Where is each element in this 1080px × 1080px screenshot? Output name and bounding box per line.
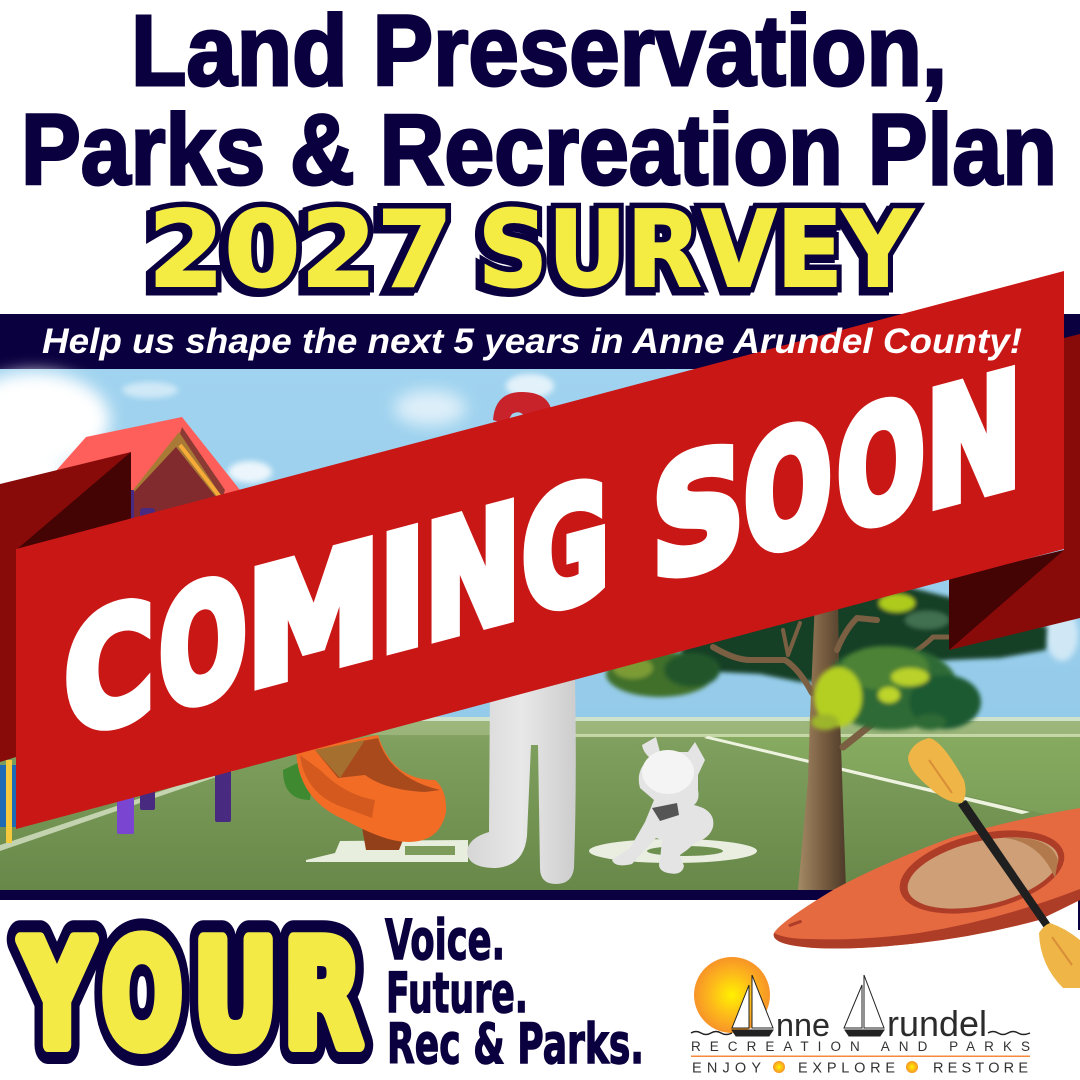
ribbon banner xyxy=(0,271,1080,829)
your wordmark xyxy=(19,910,362,1080)
your wordmark: O xyxy=(102,910,182,1079)
right ribbon tail xyxy=(949,334,1080,650)
field marking under slide xyxy=(306,840,468,862)
your lockup xyxy=(19,908,644,1080)
waves xyxy=(691,1032,1030,1034)
tree xyxy=(606,585,1047,890)
subtitle: 2027 survey: SURVEY xyxy=(474,192,911,314)
coming soon text: O xyxy=(837,363,925,568)
posts xyxy=(117,780,134,834)
orange slide xyxy=(283,735,446,850)
coming soon text: O xyxy=(744,388,832,593)
field circle xyxy=(589,839,757,863)
ribbon front xyxy=(16,271,1064,829)
subtitle: 2027 survey: SURVEY xyxy=(478,189,915,311)
subtitle: 2027 survey: 2027 xyxy=(148,189,453,311)
subtitle: 2027 survey: 2027 xyxy=(144,192,449,314)
tagline band xyxy=(0,314,1080,370)
trunk xyxy=(798,600,846,890)
coming soon text: I xyxy=(380,496,425,689)
left ribbon tail xyxy=(0,452,131,762)
logo: Anne Arundel Recreation and Parks: rundel xyxy=(887,1003,987,1044)
your wordmark: U xyxy=(194,910,277,1080)
white dog xyxy=(612,737,713,874)
your wordmark: O xyxy=(102,910,182,1079)
logo motto: ENJOY xyxy=(692,1060,761,1076)
roof xyxy=(55,417,240,530)
footer white panel edge xyxy=(1078,900,1080,930)
white figure legs xyxy=(467,680,576,884)
your voice list: Voice. xyxy=(385,908,505,972)
park scene photo xyxy=(0,369,1080,890)
branches xyxy=(713,618,948,747)
sailboat 2 xyxy=(844,975,884,1036)
red cap xyxy=(493,392,552,424)
tagline text: Help us shape the next 5 years in Anne Arundel County! xyxy=(42,322,1022,361)
your voice list: Future. xyxy=(386,961,528,1025)
coming soon text: M xyxy=(247,507,380,724)
subtitle: 2027 survey: 2027 xyxy=(148,189,453,311)
logo: Anne Arundel Recreation and Parks xyxy=(691,957,1030,1076)
your wordmark: Y xyxy=(19,911,95,1080)
grass field xyxy=(0,717,1080,890)
logo name: nne xyxy=(776,1007,830,1043)
logo recreation line: RECREATION AND PARKS xyxy=(691,1039,1030,1054)
your wordmark: Y xyxy=(19,911,95,1080)
title xyxy=(21,0,1057,206)
sun xyxy=(694,957,770,1033)
coming soon text: G xyxy=(522,447,609,651)
subtitle: 2027 survey: SURVEY xyxy=(478,189,915,311)
subtitle: 2027 survey xyxy=(144,189,915,314)
kayak with paddle xyxy=(774,738,1080,988)
coming soon text: N xyxy=(425,470,520,677)
your voice list xyxy=(385,908,644,1076)
your wordmark: R xyxy=(284,911,362,1080)
lower navy rule xyxy=(0,890,1080,900)
coming soon text: N xyxy=(926,338,1021,545)
your voice list: Rec & Parks. xyxy=(387,1012,644,1076)
coming soon text: S xyxy=(652,412,744,618)
coming soon text: C xyxy=(64,568,154,773)
logo motto: EXPLORE xyxy=(798,1060,895,1076)
sailboat 1 xyxy=(732,975,773,1036)
coming soon text: O xyxy=(159,542,247,748)
playground structure xyxy=(0,417,240,843)
logo motto xyxy=(692,1060,1028,1076)
logo motto: RESTORE xyxy=(933,1060,1028,1076)
your wordmark: R xyxy=(284,911,362,1080)
coming soon text xyxy=(64,338,1021,773)
clouds xyxy=(0,372,1078,661)
crown xyxy=(811,646,981,730)
logo rule xyxy=(691,1056,1030,1057)
your wordmark: U xyxy=(194,910,277,1080)
dark canopy xyxy=(606,585,1047,697)
